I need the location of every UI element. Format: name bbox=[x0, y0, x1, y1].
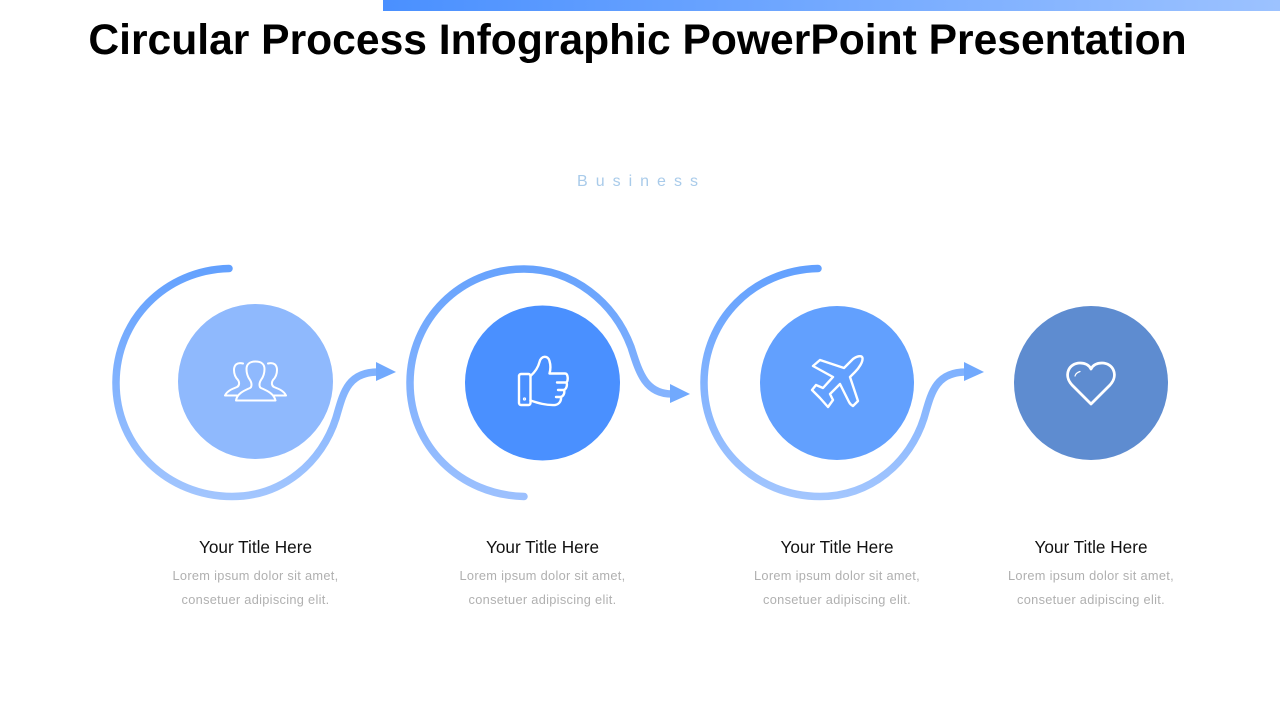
caption 3: Lorem ipsum dolor sit amet, bbox=[754, 568, 920, 583]
caption 4 bbox=[1008, 537, 1174, 607]
circle 3 with plane icon bbox=[760, 306, 914, 460]
caption 2 bbox=[460, 537, 626, 607]
swirl arrow 1 bbox=[116, 268, 396, 496]
caption 4: consetuer adipiscing elit. bbox=[1017, 592, 1165, 607]
subtitle: Business: Business bbox=[577, 173, 706, 190]
caption 2: consetuer adipiscing elit. bbox=[469, 592, 616, 607]
top accent bar bbox=[383, 0, 1280, 11]
icon: thumbs up bbox=[519, 357, 568, 405]
caption 3: Your Title Here bbox=[780, 537, 894, 557]
caption 1: Lorem ipsum dolor sit amet, bbox=[172, 568, 338, 583]
swirl arrow 3 bbox=[704, 268, 984, 496]
caption 3 bbox=[754, 537, 920, 607]
title: Circular Process Infographic PowerPoint Presentation bbox=[88, 16, 1187, 64]
caption 2: Your Title Here bbox=[486, 537, 599, 557]
caption 4: Lorem ipsum dolor sit amet, bbox=[1008, 568, 1174, 583]
icon: heart bbox=[1068, 363, 1114, 404]
circle 1 with people icon bbox=[178, 304, 333, 459]
caption 1: Your Title Here bbox=[199, 537, 312, 557]
caption 2: Lorem ipsum dolor sit amet, bbox=[460, 568, 626, 583]
icon: airplane bbox=[812, 356, 863, 407]
swirl arrow 2 bbox=[410, 269, 690, 496]
circle 4 with heart icon bbox=[1014, 306, 1168, 460]
icon: people bbox=[225, 362, 286, 400]
caption 1 bbox=[172, 537, 338, 607]
caption 4: Your Title Here bbox=[1034, 537, 1148, 557]
caption 1: consetuer adipiscing elit. bbox=[182, 592, 329, 607]
caption 3: consetuer adipiscing elit. bbox=[763, 592, 911, 607]
circle 2 with thumbs up icon bbox=[465, 306, 620, 460]
